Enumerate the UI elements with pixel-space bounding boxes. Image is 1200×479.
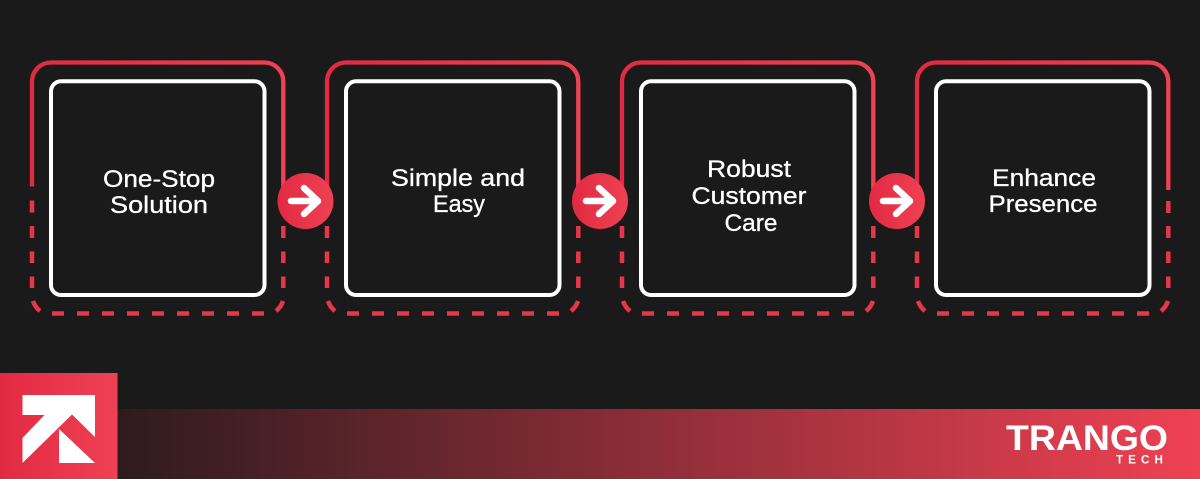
panel: One-Stop Solution [32,62,283,313]
panel: Enhance Presence [917,62,1168,313]
panel: Enhance Presence: Enhance [992,165,1096,192]
panel: Robust Customer Care: Care [724,210,778,237]
panel: Simple and Easy [327,62,578,313]
panel: Simple and Easy: Simple and [391,165,525,192]
panel: Robust Customer Care: Customer [692,183,807,210]
icon: arrow connector 2 [572,173,628,229]
panel: One-Stop Solution: Solution [110,192,208,219]
icon: logo mark square [0,373,118,479]
icon: arrow connector 3 [869,173,925,229]
icon: arrow connector 1 [278,173,334,229]
panel: Simple and Easy: Easy [433,191,485,218]
footer gradient bar [117,409,1200,479]
panel: Robust Customer Care [622,62,873,313]
panel: One-Stop Solution: One-Stop [103,166,215,193]
panel: Enhance Presence: Presence [988,191,1098,218]
logo: Trango Tech: TECH [1116,454,1168,466]
panel: Robust Customer Care: Robust [707,156,791,183]
logo: Trango Tech: TRANGO [1006,419,1168,458]
